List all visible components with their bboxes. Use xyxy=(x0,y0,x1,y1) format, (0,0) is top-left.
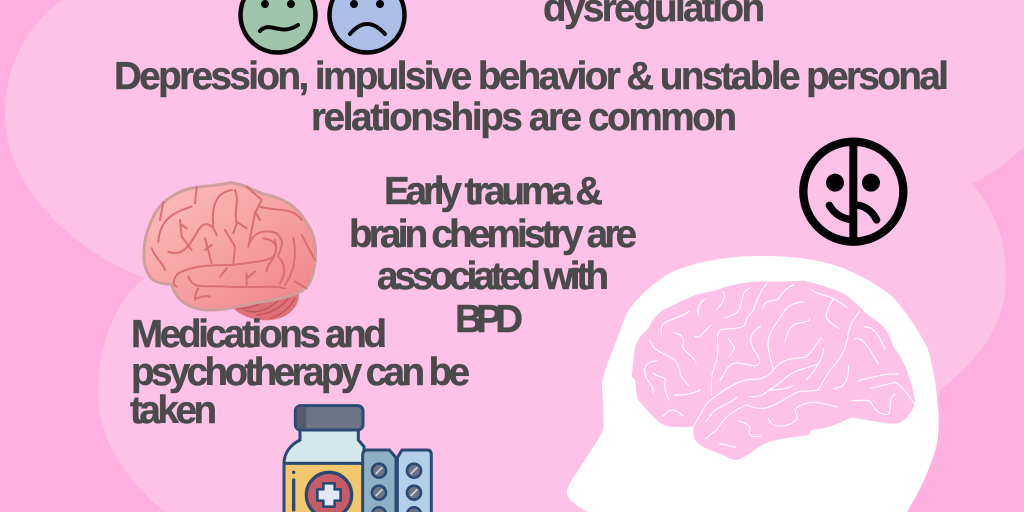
text: symptoms xyxy=(114,55,949,139)
text: treatment xyxy=(130,313,470,432)
head silhouette xyxy=(567,256,939,512)
text: treatment: Medications and xyxy=(131,313,387,356)
text: causes: brain chemistry are xyxy=(349,213,637,256)
icon: sad blue face xyxy=(330,0,404,52)
icon: split happy and sad face xyxy=(803,142,903,242)
icon: anatomical brain xyxy=(144,183,316,320)
icon: medicine bottle and blister packs xyxy=(284,406,431,512)
pink brain xyxy=(632,281,915,460)
icon: head silhouette with brain xyxy=(567,256,939,512)
text: causes xyxy=(349,170,637,341)
text: causes: Early trauma & xyxy=(384,170,603,213)
text: treatment: psychotherapy can be xyxy=(131,351,470,394)
text: causes: associated with xyxy=(377,255,609,298)
text: symptoms: Depression, impulsive behavior & unstable personal xyxy=(114,55,949,98)
text: symptoms: relationships are common xyxy=(311,96,737,139)
text: treatment: taken xyxy=(130,389,217,432)
text: causes: BPD xyxy=(455,298,523,341)
icon: uneasy green face xyxy=(240,0,316,52)
